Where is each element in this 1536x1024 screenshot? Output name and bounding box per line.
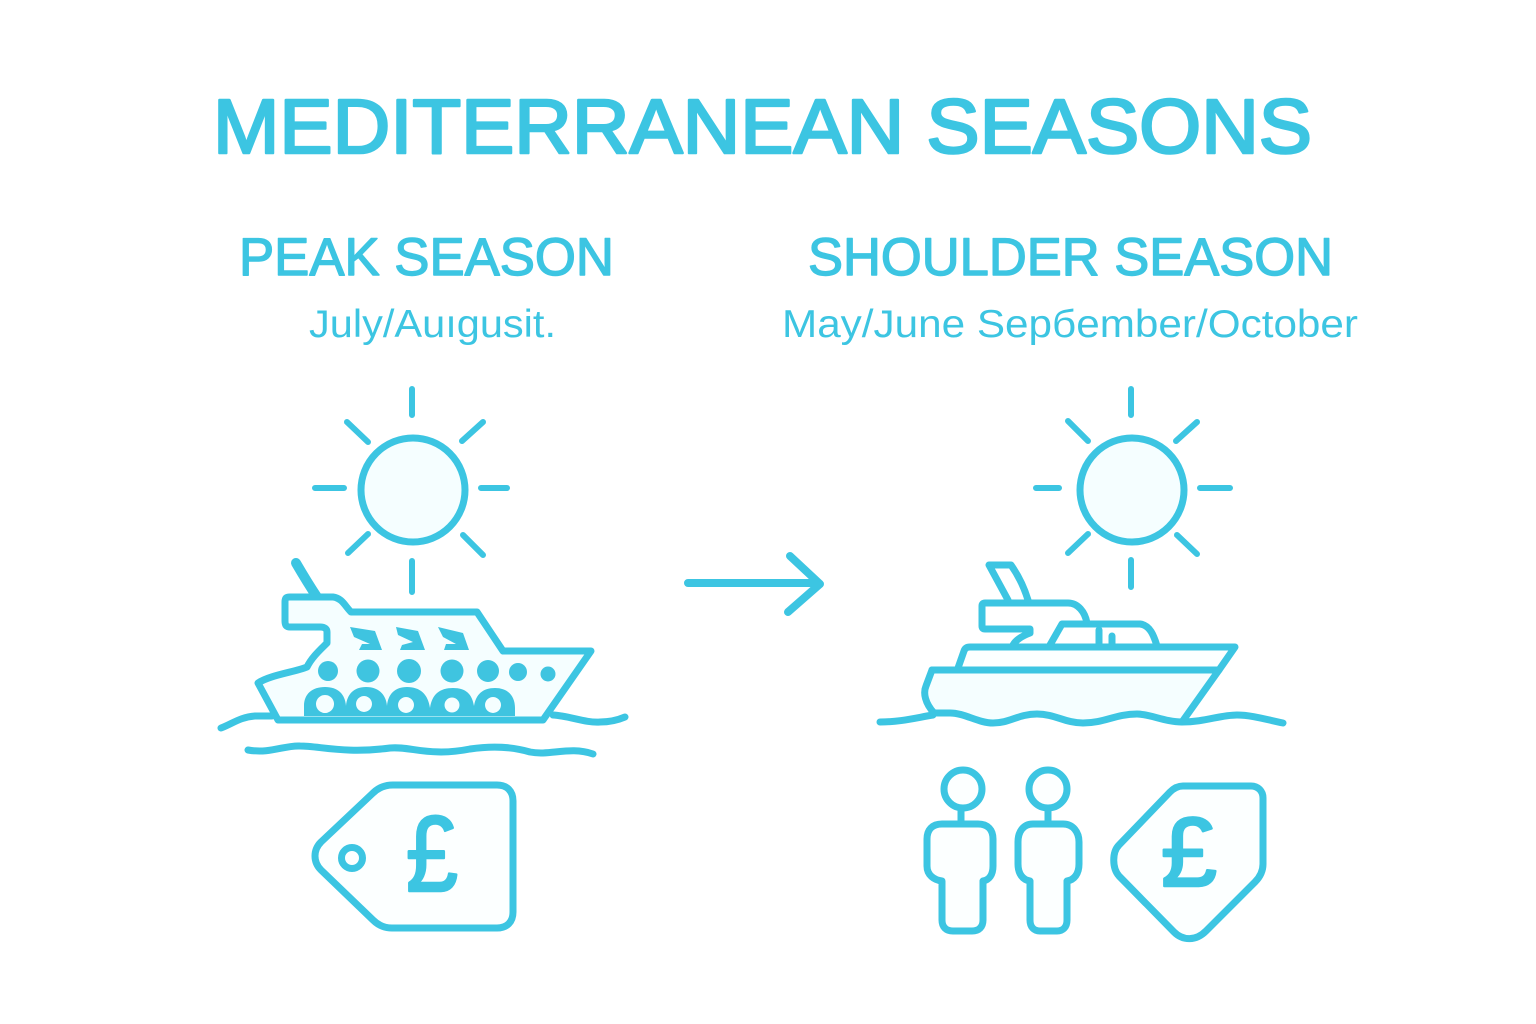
icon: price tag peak <box>315 785 513 928</box>
yacht hull <box>925 670 1219 723</box>
ship mast <box>296 563 317 597</box>
water <box>880 715 1283 723</box>
yacht mast <box>989 565 1028 600</box>
ship hull <box>258 597 591 720</box>
tag hole <box>342 848 362 868</box>
pound sign: £ <box>1161 797 1217 907</box>
text: shoulder months: May/June Sepбember/October <box>782 303 1358 346</box>
icon: shoulder sun <box>1036 389 1230 587</box>
icon: peak sun <box>315 389 507 592</box>
icon: crowded cruise ship <box>221 563 625 754</box>
icon: person two <box>1018 770 1079 931</box>
text: peak months: July/Auıgusit. <box>309 303 556 346</box>
yacht lower cabin <box>1050 624 1157 646</box>
icon: small yacht <box>880 565 1283 723</box>
yacht deck <box>932 647 1235 670</box>
icon: price tag shoulder <box>1114 786 1263 939</box>
yacht upper cabin <box>982 603 1087 645</box>
icon: person one <box>927 770 993 931</box>
ship portholes <box>318 659 556 683</box>
arrow <box>688 556 820 612</box>
title: MEDITERRANEAN SEASONS <box>213 84 1312 170</box>
heading: shoulder season: SHOULDER SEASON <box>808 228 1333 287</box>
heading: peak season: PEAK SEASON <box>239 228 614 287</box>
ship lifeboats <box>304 687 515 716</box>
pound sign: £ <box>406 793 458 914</box>
water <box>221 715 625 728</box>
ship windows <box>350 627 469 650</box>
